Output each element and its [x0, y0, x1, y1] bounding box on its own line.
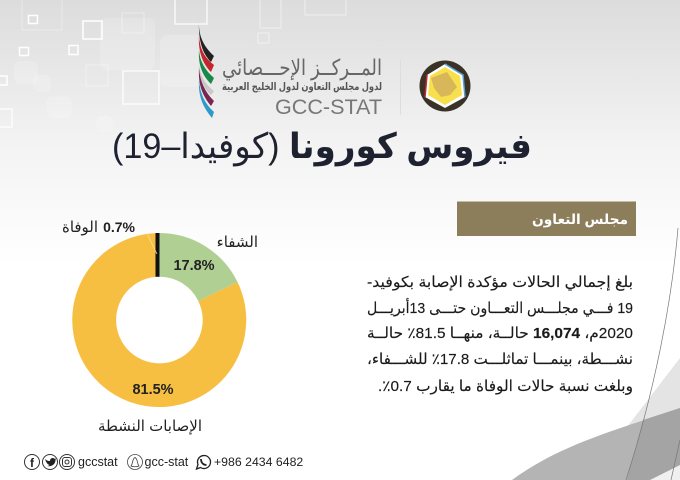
- label: deaths: 0.7%: [103, 219, 136, 235]
- handle: gccstat: gccstat: [78, 455, 118, 469]
- GCC-STAT logo: [199, 19, 382, 119]
- icon: facebook: f: [30, 456, 35, 470]
- icon: whatsapp: [196, 456, 211, 469]
- value: active cases: 81.5%: [132, 382, 174, 398]
- icon: GCC emblem: [420, 60, 470, 112]
- footer: social contacts: [24, 454, 303, 470]
- value: recovered: 17.8%: [173, 258, 215, 274]
- icon: instagram: [60, 454, 74, 470]
- icon: snapchat: [128, 454, 142, 470]
- text block: summary: نشـــطة، بينمـــا تماثلـــت 17.8٪ للشـــفاء،: [367, 351, 633, 368]
- text block: summary: 19 فـــي مجلـــس التعـــاون حتـــى 13أبريـــل: [367, 298, 633, 318]
- panel: donut chart: [72, 233, 246, 407]
- heading band: GCC: مجلس التعاون: [532, 211, 628, 228]
- handle: gcc-stat: gcc-stat: [144, 455, 189, 469]
- slice: deaths: [156, 233, 160, 277]
- label: active cases: الإصابات النشطة: [98, 418, 202, 435]
- label: recovered: الشفاء: [217, 234, 258, 251]
- icon: facebook: [24, 454, 40, 470]
- logo Latin name: GCC-STAT: [275, 95, 382, 119]
- logo Arabic subtitle: لدول مجلس التعاون لدول الخليج العربية: [222, 81, 382, 93]
- slice: recovered: [160, 233, 238, 301]
- icon: ribbon mark: [199, 19, 214, 118]
- text block: summary: 2020م، 16,074 حالــة، منهــا 81.5٪ حالــة: [367, 325, 633, 342]
- logo divider: [400, 60, 401, 115]
- title: فيروس كورونا (كوفيدا–19): [112, 127, 532, 167]
- slice edge highlight: [147, 234, 157, 254]
- corner decoration: [512, 228, 680, 480]
- text block: summary: بلغ إجمالي الحالات مؤكدة الإصابة بكوفيد-: [367, 274, 633, 292]
- heading band: GCC: [457, 202, 636, 236]
- logo Arabic name: المــركــز الإحـــصائي: [222, 55, 382, 81]
- background soft tiles: [14, 18, 202, 132]
- label: deaths name: الوفاة: [62, 219, 98, 236]
- text block: summary: [367, 274, 633, 395]
- text block: summary: وبلغت نسبة حالات الوفاة ما يقارب 0.7٪.: [378, 378, 633, 395]
- phone number: +986 2434 6482: [214, 455, 303, 469]
- background squares pattern: [0, 0, 346, 127]
- slice: active cases: [72, 233, 246, 407]
- icon: twitter: [42, 454, 58, 470]
